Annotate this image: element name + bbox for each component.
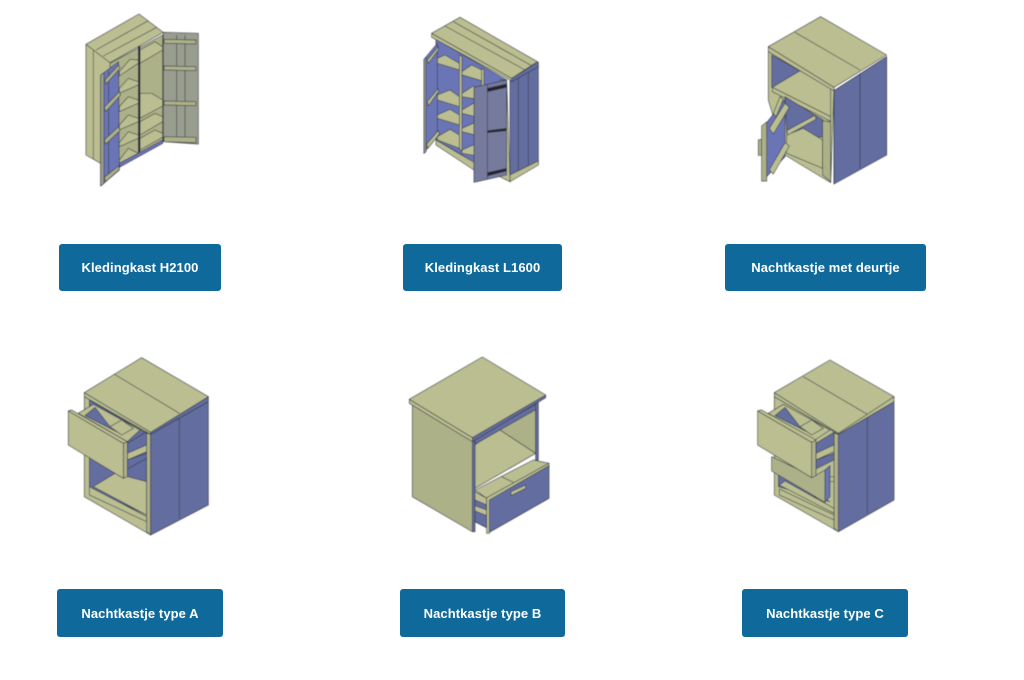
button: Nachtkastje type C (742, 589, 908, 637)
button: Nachtkastje type C: Nachtkastje type C (766, 606, 884, 620)
button: Nachtkastje met deurtje (725, 244, 926, 291)
door (758, 139, 762, 155)
button: Nachtkastje met deurtje: Nachtkastje met deurtje (751, 260, 900, 275)
button: Kledingkast H2100 (59, 244, 221, 291)
icon: Kledingkast H2100 (86, 14, 198, 186)
right door with hinges (474, 80, 507, 182)
icon: Nachtkastje type C (758, 360, 894, 532)
icon: Nachtkastje type A (68, 358, 208, 535)
button: Kledingkast L1600 (403, 244, 562, 291)
drawer (78, 404, 140, 442)
icon: Kledingkast L1600 (424, 17, 538, 182)
icon: Nachtkastje met deurtje (758, 17, 887, 184)
icon: Nachtkastje type B (409, 357, 549, 533)
button: Nachtkastje type A: Nachtkastje type A (81, 606, 199, 620)
left door (101, 62, 119, 186)
button: Nachtkastje type B (400, 589, 565, 637)
right door (163, 32, 198, 144)
drawers (768, 404, 830, 440)
right side (510, 65, 538, 182)
drawer (475, 460, 549, 498)
button: Nachtkastje type B: Nachtkastje type B (424, 606, 541, 620)
button: Kledingkast L1600: Kledingkast L1600 (425, 260, 540, 275)
button: Nachtkastje type A (57, 589, 223, 637)
left door (424, 43, 437, 153)
button: Kledingkast H2100: Kledingkast H2100 (82, 260, 198, 275)
